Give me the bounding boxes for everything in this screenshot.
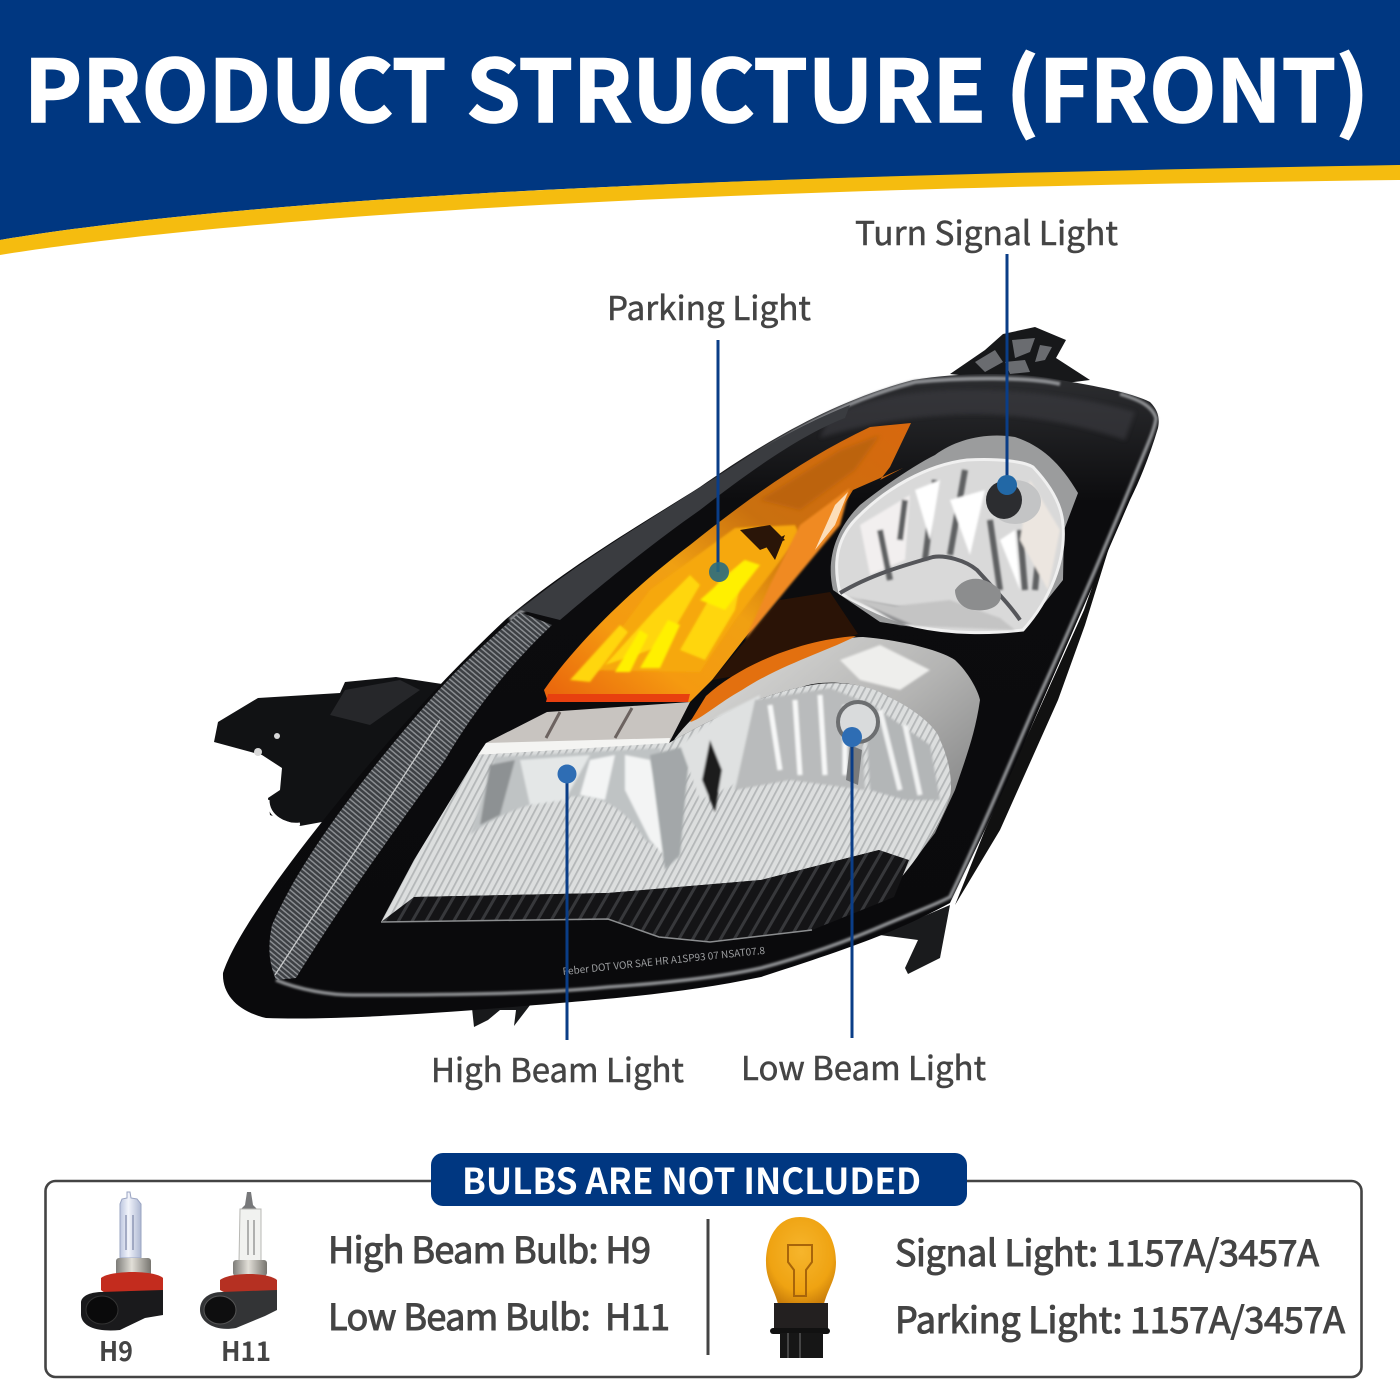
lamp housing (223, 374, 1159, 1019)
high beam label: High Beam Light (431, 1044, 684, 1092)
black lower reflector strip (381, 850, 909, 942)
parking light label: Parking Light (607, 282, 811, 330)
bottom tabs (472, 1000, 534, 1027)
yellow accent stripe (0, 165, 1400, 255)
dark amber recess (712, 592, 858, 680)
label: H11: H11 (221, 1330, 271, 1369)
lens marking text: Feber DOT VOR SAE HR A1SP93 07 NSAT07.8 (562, 942, 766, 978)
turn signal label: Turn Signal Light (855, 207, 1118, 255)
callout: turn signal light (855, 207, 1118, 495)
chrome bezel under amber (478, 702, 690, 755)
upper lens highlight (510, 378, 1060, 620)
right lower bracket (880, 905, 950, 974)
badge: bulbs not included: BULBS ARE NOT INCLUDED (462, 1153, 921, 1205)
low and high beam reflector (381, 683, 951, 922)
icon: amber bulb (766, 1217, 836, 1358)
turn signal leader (1006, 254, 1008, 485)
low beam label: Low Beam Light (741, 1042, 986, 1090)
left lens strip (269, 612, 552, 980)
parking light amber lens (544, 423, 911, 702)
parking light spec: Parking Light: 1157A/3457A (895, 1292, 1345, 1344)
amber highlights (590, 525, 800, 672)
headlamp illustration (214, 327, 1159, 1027)
low beam bulb spec: Low Beam Bulb: H11 (328, 1289, 670, 1341)
label: H9: H9 (99, 1330, 133, 1369)
turn signal reflector (837, 459, 1063, 633)
callout: low beam light (741, 727, 986, 1090)
bulb socket (989, 480, 1041, 524)
right rear housing (955, 480, 1130, 905)
lower amber strip (690, 636, 856, 722)
reflector facets (470, 688, 940, 870)
high beam bulb spec: High Beam Bulb: H9 (328, 1222, 651, 1274)
icon: H11 bulb (200, 1192, 277, 1329)
panel: bulb info (46, 1153, 1362, 1377)
callout: parking light (607, 282, 811, 582)
lower chrome arch (674, 637, 980, 880)
header banner (0, 0, 1400, 255)
icon: H9 bulb (81, 1192, 163, 1330)
signal light spec: Signal Light: 1157A/3457A (895, 1225, 1319, 1277)
low beam leader (850, 737, 854, 1038)
title: PRODUCT STRUCTURE (FRONT) (24, 22, 1369, 147)
left mounting bracket (214, 677, 442, 826)
high beam leader (566, 775, 568, 1040)
callout: high beam light (431, 764, 684, 1092)
reflector inner arc (840, 557, 1020, 620)
parking light leader (716, 340, 720, 572)
top mounting bracket (950, 327, 1090, 385)
clear lens rim (276, 394, 1156, 995)
turn signal lamp chrome surround (831, 436, 1078, 632)
